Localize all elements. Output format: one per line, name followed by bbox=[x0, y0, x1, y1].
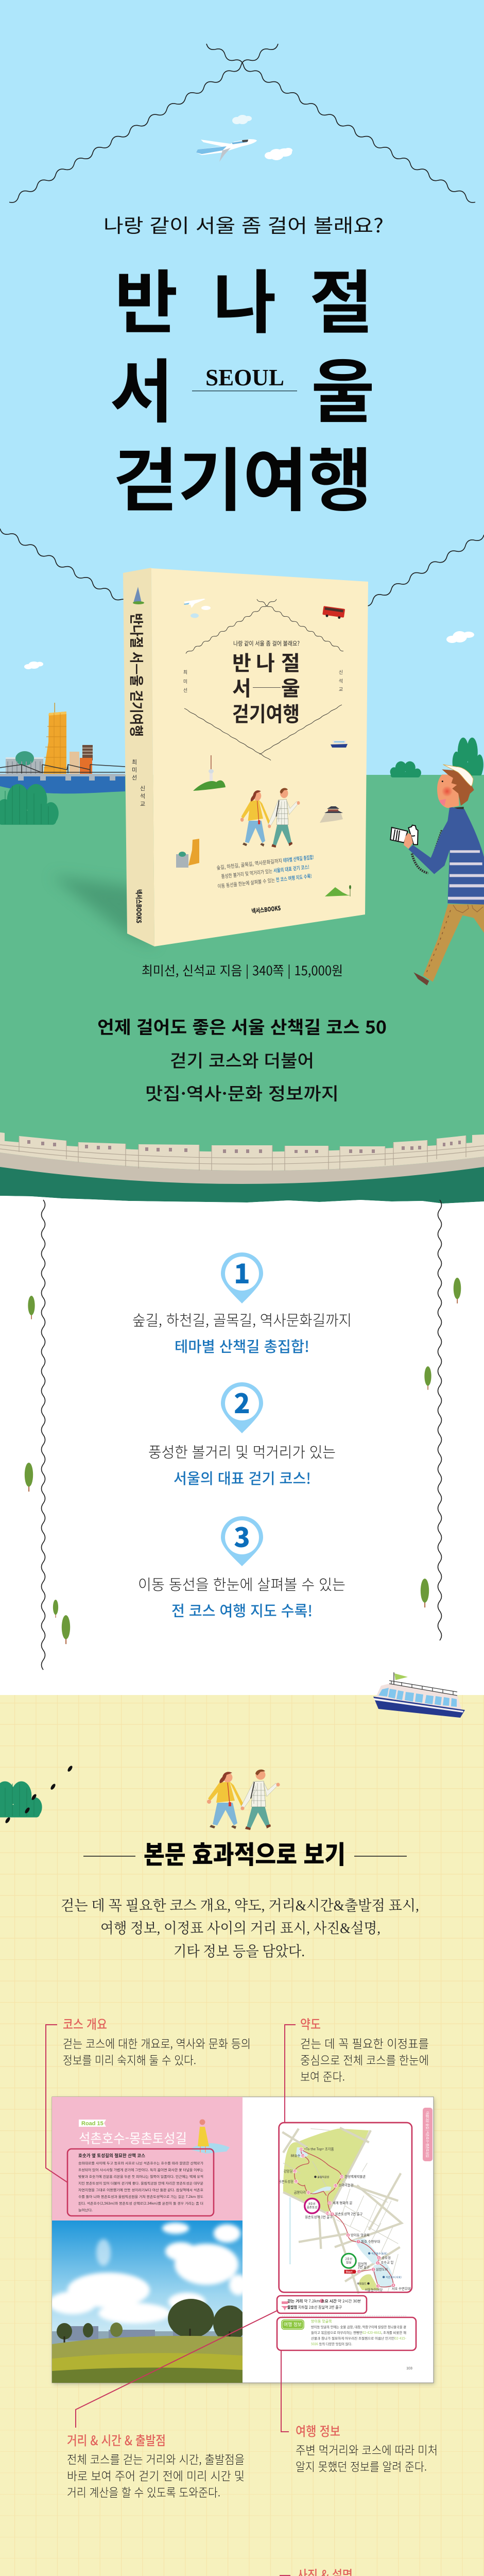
cover tagline: 나랑 같이 서울 좀 걸어 볼래요? bbox=[233, 639, 300, 648]
title: 반나절 서울 걷기여행 bbox=[110, 247, 375, 525]
SEOUL label: SEOUL bbox=[205, 364, 284, 391]
cover text lines: 서울의 대표 걷기 코스! bbox=[273, 862, 309, 874]
intro paragraph bbox=[61, 1897, 419, 1960]
spine authors: 신 bbox=[140, 785, 145, 792]
title: 반나절 서울 걷기여행: 나 bbox=[213, 247, 276, 347]
travel info box: 5036 등의 다양한 맛집이 많다. bbox=[311, 2342, 352, 2346]
intro paragraph: 기타 정보 등을 담았다. bbox=[174, 1943, 305, 1960]
summary box: 늘어난다. bbox=[78, 2208, 93, 2212]
wave roof lines: lower bbox=[0, 529, 484, 606]
tagline block: 걷기 코스와 더불어 bbox=[170, 1047, 314, 1072]
photo: park and sky bbox=[52, 2221, 243, 2383]
map route bbox=[295, 2149, 393, 2287]
station: 몽촌토성: 몽촌토성 bbox=[307, 2205, 317, 2210]
title: 반나절 서울 걷기여행: 반 bbox=[114, 247, 178, 347]
heading: 본문 효과적으로 보기: 본문 효과적으로 보기 bbox=[144, 1835, 345, 1871]
cover text lines: 전 코스 여행 지도 수록! bbox=[275, 872, 312, 883]
cover icon: clouds bbox=[191, 606, 211, 618]
spine logo: 넥서스BOOKS bbox=[134, 889, 144, 923]
building: assembly bbox=[6, 751, 43, 775]
map park bbox=[283, 2129, 369, 2214]
callout: 코스 개요: 코스 개요 bbox=[63, 2014, 107, 2033]
background: sky bbox=[0, 0, 484, 778]
road tag: Road 15 bbox=[81, 2121, 103, 2127]
camera bbox=[408, 825, 418, 844]
map box: 9 bbox=[332, 2213, 333, 2216]
cover icon: bus bbox=[322, 606, 345, 619]
strap bbox=[412, 831, 442, 873]
map box: 10 bbox=[329, 2202, 332, 2205]
cover icon: namsan tower bbox=[193, 755, 226, 791]
sweater bbox=[408, 807, 484, 905]
cover text lines bbox=[216, 853, 314, 890]
title: 반나절 서울 걷기여행: 서 bbox=[110, 336, 174, 436]
station: 잠실 bbox=[341, 2253, 356, 2268]
ground bbox=[0, 775, 484, 1187]
point 3: 전 코스 여행 지도 수록! bbox=[171, 1599, 313, 1621]
cover icon: ship bbox=[331, 740, 348, 748]
page number 103: 103 bbox=[406, 2367, 412, 2370]
tab: 아름다운 숲길 | 석촌호수-몽촌토성길 bbox=[425, 2111, 430, 2158]
point 2 bbox=[148, 1382, 336, 1488]
map box: 7 bbox=[358, 2241, 359, 2244]
cover couple bbox=[240, 788, 300, 848]
travel info box bbox=[277, 2316, 416, 2350]
map labels: ● 올림픽공원 bbox=[314, 2176, 330, 2179]
pin 1: 1 bbox=[234, 1252, 250, 1291]
icon: airplane bbox=[196, 139, 257, 162]
spread title: 석촌호수-몽촌토성길 bbox=[79, 2128, 187, 2147]
cityscape left bbox=[0, 703, 125, 825]
title: 반나절 서울 걷기여행: 울 bbox=[311, 336, 375, 436]
connector lines: spread 2 bbox=[37, 2575, 290, 2576]
map labels: 세계 평화의 문 bbox=[333, 2200, 353, 2205]
map pins bbox=[293, 2147, 395, 2288]
point 2: 서울의 대표 걷기 코스! bbox=[174, 1467, 311, 1488]
book meta: author, pages, price: 최미선, 신석교 지음 | 340쪽 | 15,000원 bbox=[142, 961, 343, 979]
summary box: 호숫가 옆 토성길의 절묘한 산책 코스 bbox=[78, 2153, 145, 2159]
cover text lines: 풍성한 볼거리 및 먹거리가 있는 bbox=[221, 867, 273, 880]
subtitle: 나랑 같이 서울 좀 걸어 볼래요? bbox=[103, 210, 384, 238]
map labels: 송호정 bbox=[382, 2256, 391, 2260]
map labels: 소마미술관 bbox=[338, 2183, 354, 2188]
callout: 거리 & 시간 & 출발점 bbox=[67, 2431, 245, 2500]
map box: 1 bbox=[358, 2270, 360, 2274]
cover title: 반 bbox=[232, 647, 251, 676]
map labels: 동호 수변무대 bbox=[361, 2239, 380, 2244]
summary box: 수를 돌아 나와 몽촌토성과 올림픽공원을 거쳐 몽촌토성역으로 가는 길은 7.2km 정도 bbox=[78, 2194, 203, 2199]
tagline block bbox=[97, 1013, 387, 1105]
cover title: 울 bbox=[281, 672, 300, 702]
cover authors: 미 bbox=[183, 679, 187, 684]
spine authors: 최 bbox=[132, 759, 137, 766]
spine title: 반나절 서—울 걷기여행 bbox=[127, 613, 147, 737]
callout: 약도: 중심으로 전체 코스를 한눈에 bbox=[300, 2050, 429, 2068]
pin 3: 3 bbox=[234, 1516, 250, 1555]
start tag: Start bbox=[345, 2270, 352, 2274]
summary box: 벚꽃과 호숫가에 진분홍 리본을 두른 듯 피어나는 철쭉이 일품이다. 인근에는 백제 유적 bbox=[78, 2174, 203, 2179]
map labels: ● 석촌호수(동호) bbox=[368, 2252, 387, 2256]
cover authors: 최 bbox=[183, 670, 187, 675]
callout: 거리 & 시간 & 출발점: 거리 & 시간 & 출발점 bbox=[67, 2431, 166, 2449]
map labels: 방이동 맛골목 bbox=[351, 2232, 370, 2237]
map labels: 호수교 밑 bbox=[381, 2260, 394, 2265]
point 2: 풍성한 볼거리 및 먹거리가 있는 bbox=[148, 1440, 336, 1462]
map box: 15 bbox=[300, 2148, 303, 2151]
connector lines: spread 1 bbox=[46, 2025, 296, 2432]
illustration: girl on lake bbox=[190, 2120, 230, 2154]
icon: ship bbox=[373, 1672, 465, 1718]
point 3: 이동 동선을 한눈에 살펴볼 수 있는 bbox=[138, 1573, 345, 1595]
map labels: 서호 수변무대 bbox=[392, 2286, 411, 2291]
point 3 bbox=[138, 1516, 345, 1621]
cover bbox=[151, 568, 368, 946]
map labels: 서울놀이마당 bbox=[365, 2287, 383, 2292]
footprints top bbox=[5, 1765, 73, 1824]
callout: 약도: 보여 준다. bbox=[300, 2067, 345, 2084]
spine tower icon bbox=[133, 587, 144, 604]
pants bbox=[423, 904, 484, 982]
map labels: 한성백제박물관 bbox=[344, 2174, 366, 2179]
spine authors: 선 bbox=[132, 774, 137, 781]
river bbox=[0, 775, 125, 793]
callout: 여행 정보: 여행 정보 bbox=[296, 2421, 340, 2440]
bushes right bbox=[390, 738, 483, 777]
spine authors bbox=[132, 759, 145, 807]
hand bbox=[404, 833, 413, 849]
map box: 4 bbox=[392, 2284, 394, 2287]
intro paragraph: 여행 정보, 이정표 사이의 거리 표시, 사진&설명, bbox=[100, 1920, 381, 1937]
cover text lines: 테마별 산책길 총집합! bbox=[283, 853, 314, 864]
cover authors: 교 bbox=[339, 687, 343, 692]
icon: cloud right bbox=[265, 148, 292, 160]
travel info box: 방이동 맛골목 bbox=[311, 2319, 332, 2324]
point 1: 숲길, 하천길, 골목길, 역사문화길까지 bbox=[132, 1309, 352, 1330]
map box: 12 bbox=[295, 2180, 298, 2183]
callout: 거리 & 시간 & 출발점: 전체 코스를 걷는 거리와 시간, 출발점을 bbox=[67, 2450, 245, 2467]
callout: 여행 정보: 알지 못했던 정보를 알려 준다. bbox=[296, 2457, 427, 2475]
map box bbox=[279, 2123, 412, 2294]
travel info box: 산물과 참나가 절묘하게 어우러진 조절찜으로 이름난 인기인 02-415- bbox=[311, 2336, 406, 2341]
cover icon: gate bbox=[320, 806, 343, 823]
map box: 11 bbox=[307, 2192, 310, 2195]
summary box: 자연지형을 그대로 이용했기에 언뜻 성이라기보다 야산 둘판 같다. 잠실역에서 석촌호 bbox=[78, 2188, 203, 2192]
summary box: 된다. 석촌호수(2,563m)와 몽촌토성 산책로(2.34km)를 온전히 돌 경우 거리는 좀 더 bbox=[78, 2201, 203, 2206]
trees bbox=[25, 1278, 461, 1644]
tab bbox=[423, 2108, 433, 2161]
callout: 약도: 걷는 데 꼭 필요한 이정표를 bbox=[300, 2034, 429, 2052]
cover authors: 석 bbox=[339, 679, 343, 684]
pink panel bbox=[52, 2097, 243, 2221]
road tag bbox=[79, 2120, 106, 2127]
cover authors bbox=[183, 670, 343, 693]
callout: 약도 bbox=[300, 2014, 429, 2084]
summary box: 송파대로를 사이에 두고 동호와 서호로 나뉜 석촌호수는 호수를 따라 깔끔한 산책로가 bbox=[78, 2161, 203, 2165]
callout: 여행 정보: 주변 먹거리와 코스에 따라 미처 bbox=[296, 2441, 438, 2458]
face bbox=[437, 774, 459, 808]
map labels: 강망길 bbox=[284, 2168, 293, 2173]
pin 2: 2 bbox=[234, 1382, 250, 1421]
callout: 약도: 약도 bbox=[300, 2014, 321, 2033]
tagline block: 언제 걸어도 좋은 서울 산책길 코스 50 bbox=[97, 1013, 387, 1039]
cover title bbox=[232, 647, 300, 727]
cover icon: mountain bbox=[325, 885, 351, 896]
book bbox=[123, 568, 368, 946]
map roads bbox=[282, 2128, 402, 2294]
pin 3 bbox=[221, 1516, 263, 1566]
cap bbox=[443, 765, 473, 786]
summary box: 지인 몽촌토성이 있어 더불어 걷기에 좋다. 올림픽공원 안에 자리한 몽촌토성은 대부분 bbox=[78, 2181, 203, 2185]
map box: 3 bbox=[377, 2285, 379, 2288]
spine authors: 미 bbox=[132, 767, 137, 773]
book spread 1 bbox=[49, 2097, 435, 2384]
cloud right bbox=[446, 631, 474, 643]
summary box bbox=[67, 2149, 214, 2216]
building: 63 bbox=[43, 703, 66, 775]
distance box bbox=[277, 2296, 367, 2313]
white section bbox=[0, 1204, 484, 1695]
map labels: 몽촌토성길 bbox=[279, 2179, 293, 2183]
man with camera bbox=[390, 765, 484, 986]
map box: 17 bbox=[334, 2184, 337, 2188]
cover title: 절 bbox=[281, 647, 300, 676]
small buildings bbox=[70, 745, 93, 774]
travel info box: 들이고 볶음밥으로 마무리하는 엔빵만 02-420-4663, 조개를 비롯한 해 bbox=[311, 2330, 406, 2335]
tagline block: 맛집·역사·문화 정보까지 bbox=[145, 1080, 339, 1105]
icon: bush with footprints bbox=[0, 1782, 42, 1817]
callout: 코스 개요: 걷는 코스에 대한 개요로, 역사와 문화 등의 bbox=[63, 2034, 251, 2052]
map labels: 88호수 bbox=[291, 2153, 301, 2158]
cover text lines: 숲길, 하천길, 골목길, 역사문화길까지 bbox=[216, 856, 283, 871]
spine authors: 석 bbox=[140, 793, 145, 800]
cover title: 서 bbox=[232, 672, 251, 702]
dark green band with torn edge bbox=[0, 1165, 484, 1204]
station: 잠실: 2호선 bbox=[345, 2257, 352, 2261]
map lakes bbox=[296, 2147, 393, 2287]
cover title: 나 bbox=[256, 647, 275, 676]
summary box: 조성되어 있어 사시사철 가볍게 걷기에 그만이다. 특히 봄이면 화사한 꽃 터널을 이루는 bbox=[78, 2167, 203, 2172]
hair bbox=[442, 769, 474, 806]
cover authors: 선 bbox=[183, 688, 187, 693]
map labels: 롯데월드 ● bbox=[357, 2282, 370, 2286]
map labels: 몽촌토성역 1번 출구 bbox=[305, 2215, 333, 2219]
intro paragraph: 걷는 데 꼭 필요한 코스 개요, 약도, 거리&시간&출발점 표시, bbox=[61, 1897, 419, 1914]
map box: 8 bbox=[348, 2234, 349, 2237]
distance box: 출발점 지하철 2호선 잠실역 2번 출구 bbox=[287, 2304, 342, 2310]
map box: 2 bbox=[372, 2268, 374, 2272]
yellow grid section background bbox=[0, 1695, 484, 2576]
book shadow bbox=[51, 876, 154, 946]
icon: walking couple bbox=[207, 1770, 280, 1830]
cover icon: buildings bbox=[176, 839, 199, 868]
map box: 5 bbox=[377, 2262, 378, 2265]
map labels: 잠실역 bbox=[358, 2261, 367, 2266]
shoe bbox=[413, 972, 429, 986]
map labels: 곰말다리 bbox=[294, 2190, 306, 2195]
station: 몽촌토성: 8호선 bbox=[308, 2201, 316, 2206]
map labels bbox=[279, 2146, 411, 2292]
bridge bbox=[0, 765, 125, 781]
map labels: ● 석촌호수(서호) bbox=[383, 2276, 402, 2279]
map labels: 몽촌토성역 2번 출구 bbox=[335, 2212, 362, 2216]
pin 2 bbox=[221, 1382, 263, 1433]
callout: 거리 & 시간 & 출발점: 바로 보여 주어 걷기 전에 미리 시간 및 bbox=[67, 2466, 245, 2484]
map box: 6 bbox=[378, 2257, 379, 2260]
point 1: 테마별 산책길 총집합! bbox=[175, 1335, 309, 1357]
map box: 16 bbox=[340, 2176, 343, 2179]
wave roof lines: top bbox=[9, 44, 475, 202]
travel info box: 방이동 맛골목 안에는 숯불 곱창, 대창, 막창구이에 칼칼한 청나물국을 곁 bbox=[311, 2325, 406, 2329]
spine bbox=[123, 568, 154, 946]
pin 1 bbox=[221, 1252, 263, 1303]
start tag bbox=[344, 2270, 356, 2274]
icon: cloud small bbox=[232, 115, 252, 124]
callout: 코스 개요 bbox=[63, 2014, 251, 2068]
cloud left bbox=[24, 662, 43, 669]
station: 몽촌토성 bbox=[305, 2198, 319, 2213]
callout: 거리 & 시간 & 출발점: 거리 계산을 할 수 있도록 도와준다. bbox=[67, 2483, 220, 2500]
map labels: 2번 출구 bbox=[358, 2265, 370, 2269]
cover icon: plane bbox=[184, 599, 205, 608]
cover text lines: 이동 동선을 한눈에 살펴볼 수 있는 bbox=[217, 876, 275, 890]
spine authors: 교 bbox=[140, 801, 145, 807]
cover authors: 신 bbox=[339, 670, 343, 675]
cover logo: 넥서스BOOKS bbox=[251, 904, 281, 916]
map box: 14 bbox=[301, 2155, 304, 2158]
bush bbox=[0, 784, 59, 825]
travel info box: 여행 정보 bbox=[284, 2321, 302, 2328]
title: 반나절 서울 걷기여행: 절 bbox=[309, 247, 373, 347]
map box: 13 bbox=[293, 2170, 297, 2173]
station: 잠실: 잠실 bbox=[346, 2260, 352, 2265]
map box: 18 bbox=[326, 2212, 329, 2215]
callout: 여행 정보 bbox=[296, 2421, 438, 2475]
map labels: <To the Top> 조각품 bbox=[304, 2146, 334, 2151]
cover wave diamond bbox=[184, 599, 343, 760]
city wall bbox=[0, 1132, 484, 1184]
callout: 코스 개요: 정보를 미리 숙지해 둘 수 있다. bbox=[63, 2050, 196, 2068]
distance box: 걷는 거리 약 7.2km 소요 시간 약 2시간 30분 bbox=[287, 2298, 361, 2304]
cover title: 걷기여행 bbox=[232, 698, 300, 727]
trail wave lines bbox=[41, 1200, 442, 1670]
map labels: 삼전도비 bbox=[376, 2267, 388, 2272]
title: 반나절 서울 걷기여행: 걷기여행 bbox=[113, 425, 372, 525]
point 1 bbox=[132, 1252, 352, 1357]
